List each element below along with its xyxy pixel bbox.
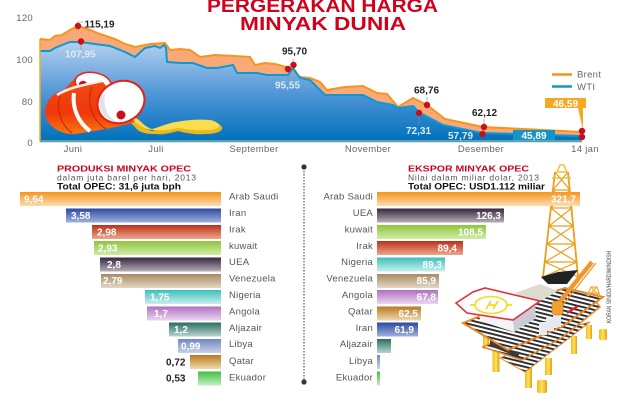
bar values: 2,93 [98, 244, 118, 254]
callout: 45,89 [513, 130, 555, 142]
bar values: 321,7 [551, 194, 576, 206]
value labels: 72,31 [406, 126, 431, 137]
back barrel [50, 70, 112, 112]
country labels: Libya [229, 339, 253, 350]
crane base [552, 301, 563, 315]
upper deck [463, 288, 603, 350]
dark underside [490, 338, 520, 357]
y axis labels: 120 [16, 13, 33, 24]
divider [301, 164, 307, 385]
heading: ekspor minyak OPEC: Total OPEC: USD1.112 miliar [408, 182, 546, 192]
title: MINYAK DUNIA [240, 14, 406, 34]
loose drums [537, 329, 607, 393]
legend: Brent [577, 70, 601, 80]
x axis labels: 14 jan [571, 144, 599, 155]
country labels: Qatar [229, 356, 254, 367]
x axis labels: Desember [458, 144, 504, 155]
oil spill [125, 115, 222, 134]
bar values: 62,5 [399, 309, 418, 320]
value labels: 95,70 [282, 46, 307, 58]
crane [558, 262, 596, 306]
heading: produksi minyak OPEC: Total OPEC: 31,6 juta bph [57, 182, 181, 192]
small deck tower [587, 287, 600, 296]
heading: produksi minyak OPEC: dalam juta barel per hari, 2013 [57, 172, 196, 182]
bar values: 61,9 [395, 325, 414, 336]
bar values: 0,99 [181, 342, 201, 352]
bar values: 1,75 [150, 292, 170, 304]
illustration: oil rig [456, 165, 607, 393]
value labels: 95,55 [275, 80, 300, 92]
icon: spilled oil barrels [45, 70, 222, 134]
derrick tower [543, 165, 578, 277]
country labels: Iran [229, 208, 246, 219]
title [207, 0, 438, 34]
bar values [395, 194, 576, 336]
platform legs [483, 325, 592, 388]
bar values: 1,7 [154, 309, 168, 320]
bar values: 2,98 [97, 228, 117, 238]
legend [552, 70, 601, 93]
country labels: Nigeria [341, 257, 373, 268]
country labels: Arab Saudi [323, 192, 373, 202]
bar values: 3,58 [71, 211, 91, 222]
bar values: 9,64 [24, 194, 44, 206]
bar chart: produksi [20, 192, 279, 386]
line: WTI [40, 42, 582, 136]
helipad [456, 288, 540, 320]
value labels [65, 20, 497, 142]
x axis labels: Juni [64, 144, 82, 155]
bar values: 85,9 [417, 276, 436, 287]
heading: produksi minyak OPEC [57, 164, 196, 192]
value labels: 62,12 [472, 108, 497, 119]
bar values: 108,5 [458, 228, 483, 238]
country labels: Irak [229, 224, 246, 236]
y axis labels: 80 [22, 97, 33, 108]
bar values: 89,3 [423, 260, 442, 271]
country labels: Venezuela [229, 274, 276, 284]
red markers [75, 23, 585, 140]
leader lines [78, 22, 484, 136]
country labels: Angola [229, 306, 261, 318]
country labels: kuwait [345, 224, 373, 236]
x axis labels: September [229, 144, 279, 155]
front barrel body [45, 82, 135, 134]
barrel ribs [58, 87, 106, 133]
country labels: Aljazair [229, 323, 262, 334]
country labels: kuwait [229, 241, 258, 252]
bar chart: ekspor [323, 192, 580, 386]
red marking [567, 306, 578, 313]
credit: KORAN SINDO/HARDIWINDISH [607, 251, 613, 323]
area: Brent spread [40, 26, 582, 141]
lower deck [483, 300, 600, 360]
y axis labels [16, 13, 33, 149]
front barrel end [91, 73, 151, 131]
chart frame [40, 39, 582, 141]
heading: ekspor minyak OPEC [408, 164, 546, 192]
bar values: 89,4 [438, 244, 457, 254]
deck building [479, 284, 558, 332]
legend: WTI [577, 82, 595, 93]
country labels [229, 192, 279, 384]
callout: 46,59 [545, 98, 586, 130]
callout: 46,59: 46,59 [553, 99, 578, 110]
data points and value labels [65, 20, 586, 142]
bar values: 2,79 [103, 276, 123, 287]
heading: ekspor minyak OPEC: Nilai dalam miliar dolar, 2013 [408, 172, 539, 182]
country labels: UEA [229, 257, 250, 268]
value labels: 115,19 [84, 20, 115, 30]
y axis labels: 0 [27, 138, 33, 149]
bottom floor [500, 322, 590, 372]
tanks [539, 314, 561, 335]
value labels: 107,95 [65, 50, 96, 60]
heading: ekspor minyak OPEC: EKSPOR MINYAK OPEC [408, 164, 529, 174]
outside values [166, 358, 186, 384]
value labels: 57,79 [448, 131, 473, 142]
line chart: Brent and WTI [40, 26, 582, 142]
x axis labels: November [345, 144, 391, 155]
outside values: 0,72 [166, 358, 186, 368]
bar values: 1,2 [174, 325, 188, 336]
country labels: Irak [356, 241, 373, 252]
country labels: Arab Saudi [229, 192, 279, 202]
value labels: 68,76 [414, 86, 439, 96]
country labels: Aljazair [340, 339, 373, 350]
rig floor [541, 270, 578, 284]
x axis labels [64, 144, 599, 155]
country labels: Nigeria [229, 290, 261, 301]
country labels: Ekuador [336, 372, 373, 384]
country labels: Qatar [348, 306, 373, 318]
callout: 45,89: 45,89 [521, 131, 547, 142]
area: WTI [40, 42, 582, 141]
heading: produksi minyak OPEC: PRODUKSI MINYAK OPEC [57, 164, 191, 174]
bar values [24, 194, 201, 352]
country labels [323, 192, 373, 384]
y axis labels: 100 [16, 55, 33, 66]
country labels: Angola [342, 290, 373, 301]
country labels: Iran [356, 323, 373, 334]
outside values: 0,53 [166, 374, 186, 384]
country labels: Venezuela [326, 274, 373, 284]
bar values: 67,8 [417, 292, 436, 304]
barrel stripes [74, 93, 90, 131]
barrel plug [116, 110, 126, 120]
country labels: Ekuador [229, 372, 266, 384]
country labels: Libya [349, 356, 373, 367]
line: Brent [40, 26, 582, 132]
x axis labels: Juli [148, 144, 164, 155]
country labels: UEA [353, 208, 373, 219]
bar values: 126,3 [476, 211, 501, 222]
bar values: 2,8 [107, 260, 121, 271]
